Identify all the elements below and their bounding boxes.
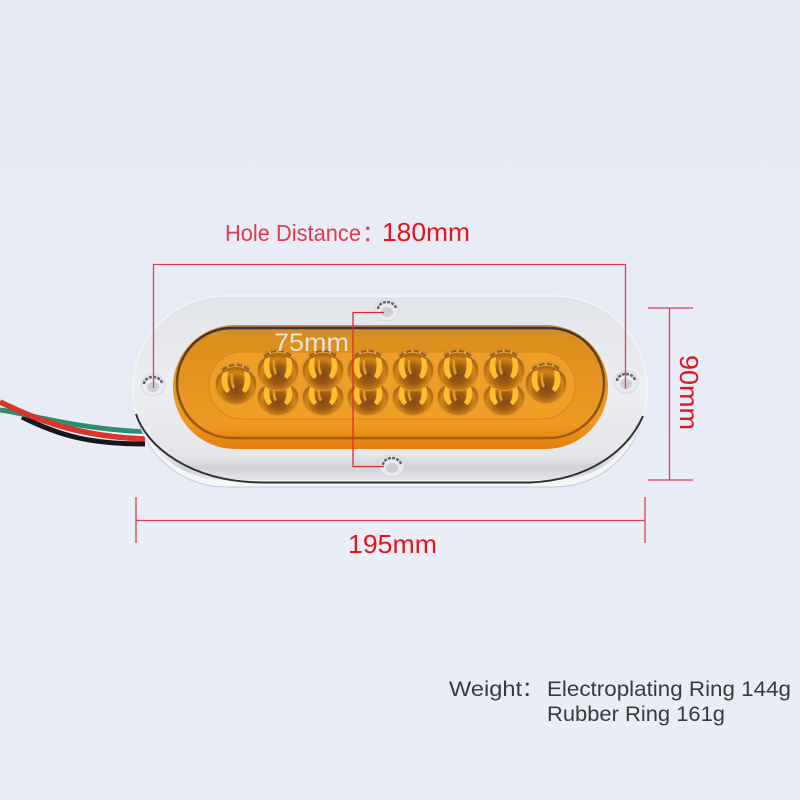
wires (0, 402, 145, 444)
dimension: 75mm lines (353, 312, 384, 466)
label: 180mm: 180mm (382, 217, 470, 247)
dimension: hole distance lines (154, 264, 626, 389)
amber lens (173, 325, 608, 449)
dimension: width lines (136, 497, 645, 543)
screw holes (141, 299, 638, 477)
chrome bezel rim (135, 305, 645, 487)
LEDs (215, 349, 567, 416)
label: 75mm: 75mm (274, 329, 349, 357)
electroplating ring: Electroplating Ring 144g (547, 678, 791, 701)
inner strip (209, 352, 575, 419)
dimension: height lines (648, 308, 693, 480)
rubber ring: Rubber Ring 161g (547, 703, 725, 726)
label: hole distance: Hole Distance (225, 220, 361, 246)
rim shadow line (136, 414, 643, 482)
label: 90mm: 90mm (674, 355, 704, 430)
label: 195mm: 195mm (348, 529, 437, 559)
product: LED light (0, 296, 647, 487)
chrome bezel plate (133, 296, 647, 481)
label: colon: ： (362, 220, 385, 246)
weight label: Weight (449, 678, 522, 701)
weight colon: ： (522, 678, 543, 701)
weight note (449, 678, 791, 726)
